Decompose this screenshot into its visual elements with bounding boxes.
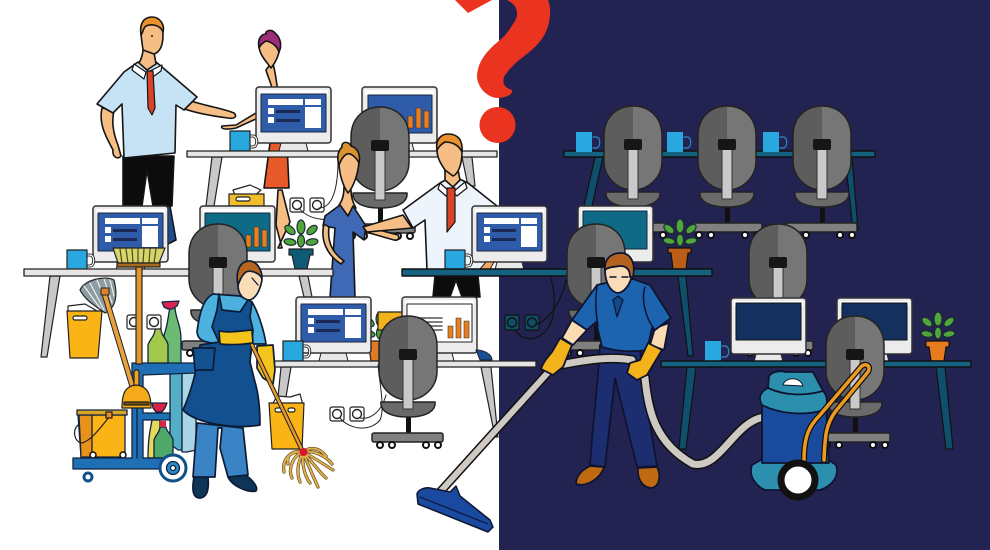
document bin behind monitor bbox=[378, 312, 402, 330]
trousers bbox=[590, 345, 657, 467]
middle left desk bbox=[24, 269, 333, 276]
chair bbox=[819, 316, 890, 448]
yellow gloves bbox=[219, 330, 253, 345]
icon: mug bbox=[445, 250, 472, 270]
trousers bbox=[193, 423, 248, 477]
computer mouse bbox=[476, 350, 492, 360]
background: night side panel bbox=[499, 0, 990, 550]
icon: mug bbox=[230, 131, 257, 151]
shoes bbox=[193, 474, 257, 498]
cleaner woman bbox=[183, 261, 275, 498]
vacuum cleaner canister bbox=[751, 365, 869, 497]
blouse bbox=[197, 294, 266, 344]
icon: plant bbox=[662, 219, 698, 269]
chair bbox=[344, 107, 415, 239]
mop bucket bbox=[75, 410, 127, 458]
man vacuuming bbox=[562, 253, 671, 488]
navy screen monitors bbox=[731, 298, 912, 362]
broom bbox=[113, 248, 165, 364]
shirt bbox=[572, 279, 671, 351]
center lower desk bbox=[273, 361, 536, 367]
bin with paper bbox=[269, 394, 304, 449]
top left desk monitors bbox=[256, 87, 437, 151]
mop hanging bbox=[80, 278, 132, 385]
plastic bags on trolley bbox=[170, 373, 196, 452]
middle left monitors bbox=[93, 206, 275, 270]
icon: plant bbox=[283, 220, 319, 269]
apron bbox=[183, 294, 260, 427]
bottles on top shelf bbox=[148, 301, 181, 363]
face bbox=[238, 268, 262, 300]
icon: mug bbox=[67, 250, 94, 270]
dustpan bbox=[122, 370, 151, 408]
top left desk bbox=[187, 151, 497, 157]
center desk lower area: sockets bbox=[330, 407, 364, 421]
canister lid bbox=[760, 371, 827, 413]
icon: mug bbox=[705, 341, 729, 361]
bottles on lower shelf bbox=[148, 403, 173, 458]
woman in red dress behind monitor bbox=[222, 30, 290, 248]
shoes bbox=[576, 466, 659, 488]
bottom right desk legs bbox=[679, 367, 953, 449]
vacuum tube and head bbox=[417, 358, 632, 532]
arms bbox=[562, 320, 587, 345]
wall socket bbox=[127, 315, 161, 329]
center lower monitors bbox=[296, 297, 477, 361]
chair bbox=[182, 224, 253, 356]
center right monitors bbox=[472, 206, 653, 270]
dark wall sockets and cable bbox=[505, 277, 566, 339]
mop bbox=[252, 345, 333, 487]
middle left desk legs bbox=[41, 276, 312, 357]
bottom right desk bbox=[661, 361, 971, 367]
chair bbox=[742, 224, 813, 356]
chair bbox=[372, 316, 443, 448]
icon: red question mark bbox=[455, 0, 550, 143]
center right desk bbox=[402, 269, 712, 276]
wall sockets and cable bbox=[290, 160, 340, 219]
top left desk legs bbox=[206, 157, 475, 206]
plant behind center monitors bbox=[362, 312, 398, 361]
center lower desk legs bbox=[278, 367, 498, 437]
canister base bbox=[751, 458, 837, 490]
socket cable bbox=[340, 365, 386, 428]
trolley frame bbox=[73, 363, 195, 469]
vacuum hose bbox=[645, 378, 765, 464]
man in light blue shirt bbox=[97, 17, 236, 245]
top right mugs bbox=[576, 132, 787, 152]
hand resting under monitor bbox=[480, 262, 494, 269]
vacuum man's yellow gloves bbox=[541, 338, 662, 380]
top right chair row bbox=[597, 106, 857, 238]
bucket hanging bbox=[67, 304, 102, 358]
cleaning trolley bbox=[73, 301, 196, 481]
top right desk bbox=[564, 151, 875, 157]
icon: plant bbox=[920, 312, 956, 361]
tissue box bbox=[229, 185, 264, 206]
vacuum wheel bbox=[781, 463, 815, 497]
chair bbox=[560, 224, 631, 356]
center right desk leg bbox=[678, 276, 693, 356]
woman in blue dress bbox=[323, 142, 399, 297]
top right desk legs bbox=[584, 157, 858, 230]
man in white shirt bbox=[363, 134, 497, 297]
head bbox=[605, 258, 632, 293]
canister body bbox=[762, 405, 829, 463]
vacuum handle bbox=[804, 365, 869, 460]
icon: mug bbox=[283, 341, 310, 361]
